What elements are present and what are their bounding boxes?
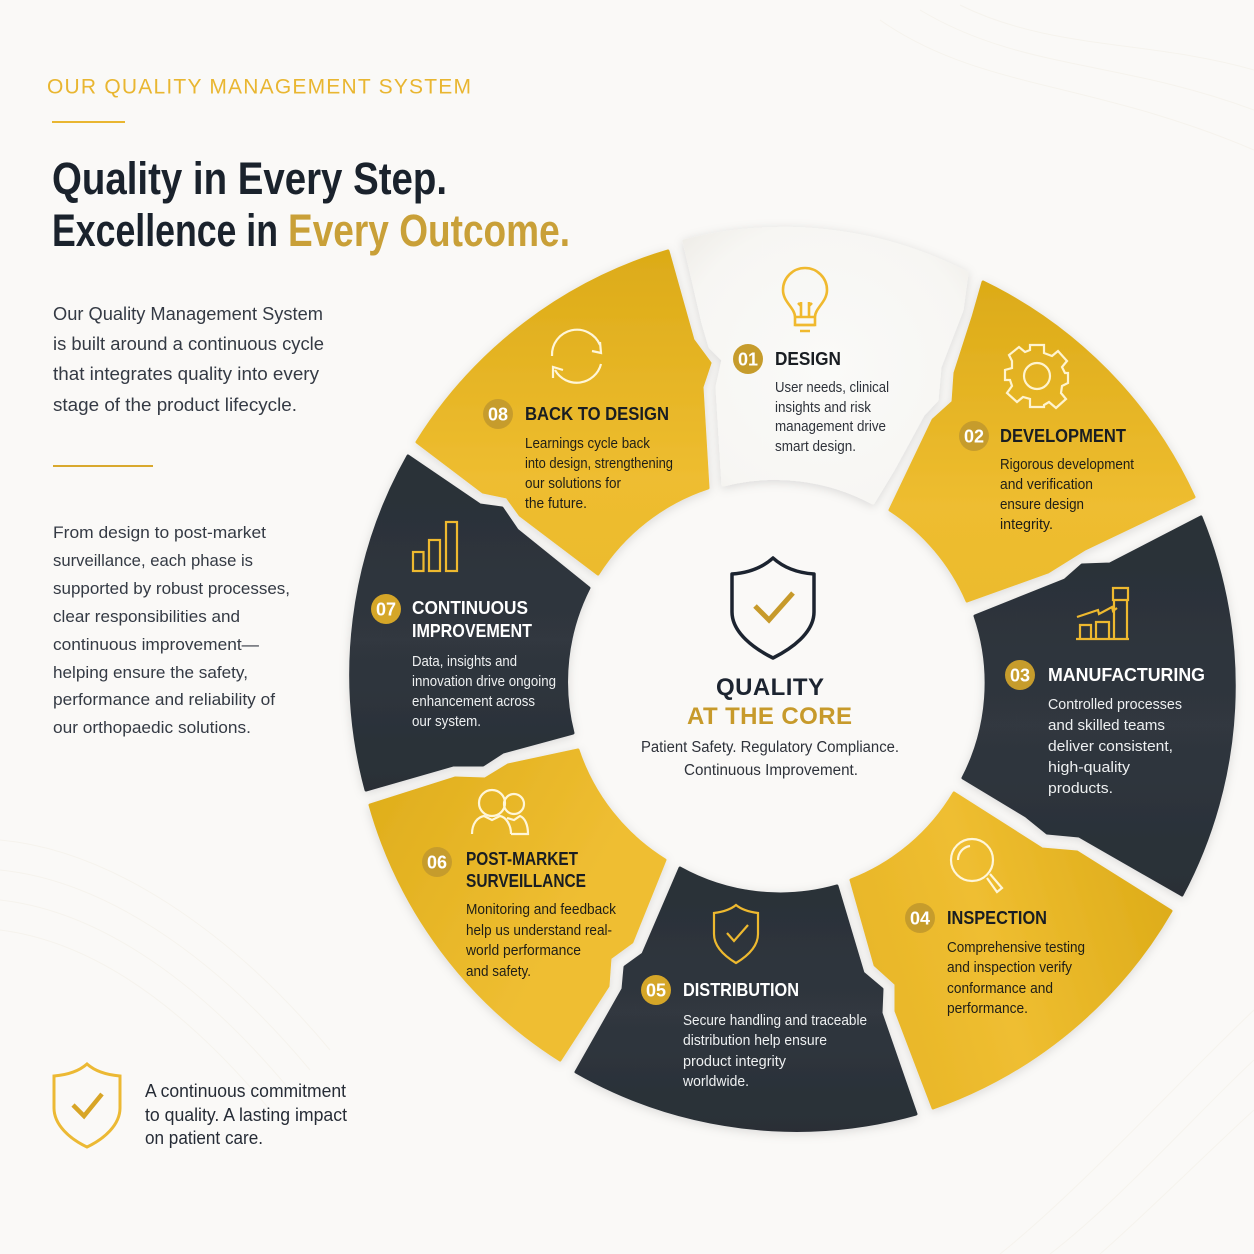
- heading: at the core: AT THE CORE: [687, 703, 852, 730]
- commitment statement: [145, 1081, 347, 1148]
- text: back to design body: the future.: [525, 496, 587, 512]
- supporting paragraph: From design to post-market: [53, 523, 266, 542]
- text: development body: integrity.: [1000, 517, 1053, 533]
- badge 07: [371, 594, 401, 624]
- main title: [52, 153, 570, 256]
- badge 08: 08: [488, 404, 508, 424]
- text: back to design body: into design, strengthening: [525, 456, 673, 472]
- supporting paragraph: surveillance, each phase is: [53, 551, 253, 570]
- text: inspection body: Comprehensive testing: [947, 940, 1085, 956]
- text: development body: [1000, 457, 1134, 533]
- text: back to design body: Learnings cycle back: [525, 436, 651, 452]
- text: distribution body: worldwide.: [682, 1074, 749, 1090]
- text: inspection body: conformance and: [947, 981, 1053, 997]
- text: continuous improvement body: [412, 654, 556, 730]
- centre: quality at the core: [641, 558, 899, 779]
- heading: distribution: DISTRIBUTION: [683, 979, 799, 1000]
- text: post-market body: [465, 902, 617, 980]
- heading: continuous improvement: [412, 597, 533, 641]
- text: inspection body: performance.: [947, 1001, 1028, 1017]
- supporting paragraph: clear responsibilities and: [53, 607, 240, 626]
- intro paragraph: [53, 303, 324, 415]
- text: continuous improvement body: Data, insights and: [412, 654, 517, 670]
- panel: 01 design: [684, 228, 967, 503]
- text: development body: Rigorous development: [1000, 457, 1134, 473]
- text: development body: ensure design: [1000, 497, 1084, 513]
- intro paragraph: that integrates quality into every: [53, 363, 320, 384]
- badge 06: [422, 847, 452, 877]
- heading: continuous improvement: IMPROVEMENT: [412, 620, 533, 641]
- badge 02: [959, 421, 989, 451]
- text: design body: smart design.: [775, 439, 856, 455]
- badge 05: [641, 975, 671, 1005]
- badge 01: 01: [738, 350, 758, 370]
- text: back to design body: our solutions for: [525, 476, 621, 492]
- main title: Quality in Every Step.: [52, 153, 447, 204]
- icon: factory chart: [1076, 588, 1129, 639]
- supporting paragraph: supported by robust processes,: [53, 579, 290, 598]
- text: inspection body: and inspection verify: [947, 960, 1073, 976]
- main title: Excellence in: [52, 205, 278, 256]
- text: continuous improvement body: our system.: [412, 714, 481, 730]
- heading: post-market surveillance: POST-MARKET: [466, 848, 579, 869]
- badge 05: 05: [646, 980, 666, 1000]
- text: post-market body: and safety.: [466, 964, 531, 980]
- badge 02: 02: [964, 426, 984, 446]
- panel: 04 inspection: [851, 793, 1171, 1108]
- icon: gear: [1005, 345, 1068, 408]
- icon: refresh arrows: [552, 330, 601, 383]
- icon: bar chart: [413, 522, 457, 571]
- badge 01: [733, 344, 763, 374]
- badge 08: [483, 399, 513, 429]
- intro paragraph: stage of the product lifecycle.: [53, 394, 297, 415]
- panel: 02 development: [890, 282, 1194, 601]
- text: manufacturing body: [1048, 697, 1182, 797]
- icon: commitment shield: [54, 1064, 120, 1147]
- supporting paragraph: continuous improvement—: [53, 635, 259, 654]
- badge 03: [1005, 660, 1035, 690]
- icon: central shield: [732, 558, 814, 658]
- text: distribution body: [682, 1013, 867, 1090]
- text: continuous improvement body: enhancement across: [412, 694, 535, 710]
- panel: 05 distribution: [576, 868, 916, 1130]
- supporting paragraph: helping ensure the safety,: [53, 663, 248, 682]
- text: design body: insights and risk: [775, 400, 872, 416]
- heading: continuous improvement: CONTINUOUS: [412, 597, 528, 618]
- text: design body: User needs, clinical: [775, 380, 889, 396]
- badge 04: 04: [910, 908, 930, 928]
- commitment statement: to quality. A lasting impact: [145, 1105, 347, 1125]
- kicker heading: OUR QUALITY MANAGEMENT SYSTEM: [47, 76, 471, 98]
- badge 03: 03: [1010, 666, 1030, 686]
- heading: quality: QUALITY: [716, 674, 824, 701]
- heading: post-market surveillance: [466, 848, 586, 891]
- badge 07: 07: [376, 600, 396, 620]
- text: continuous improvement body: innovation drive ongoing: [412, 674, 556, 690]
- intro paragraph: Our Quality Management System: [53, 303, 323, 324]
- supporting paragraph: our orthopaedic solutions.: [53, 718, 251, 737]
- supporting paragraph: performance and reliability of: [53, 690, 275, 709]
- commitment statement: on patient care.: [145, 1128, 263, 1148]
- text: manufacturing body: deliver consistent,: [1048, 739, 1173, 755]
- text: manufacturing body: Controlled processes: [1048, 697, 1182, 713]
- icon: shield check: [714, 905, 758, 963]
- text: post-market body: help us understand real-: [466, 923, 612, 939]
- icon: people: [472, 790, 528, 834]
- text: design body: [775, 380, 889, 455]
- heading: development: DEVELOPMENT: [1000, 425, 1127, 446]
- text: distribution body: product integrity: [683, 1054, 787, 1070]
- text: back to design body: [525, 436, 673, 512]
- intro paragraph: is built around a continuous cycle: [53, 333, 324, 354]
- text: manufacturing body: and skilled teams: [1048, 718, 1165, 734]
- text: distribution body: Secure handling and traceable: [683, 1013, 867, 1029]
- text: post-market body: Monitoring and feedback: [466, 902, 617, 918]
- commitment statement: A continuous commitment: [145, 1081, 346, 1101]
- text: manufacturing body: products.: [1048, 781, 1113, 797]
- text: centre tagline: [641, 739, 899, 779]
- text: centre tagline: Patient Safety. Regulatory Compliance.: [641, 739, 899, 756]
- icon: light bulb: [783, 268, 827, 331]
- badge 04: [905, 903, 935, 933]
- text: design body: management drive: [775, 419, 886, 435]
- supporting paragraph: [53, 523, 290, 737]
- text: centre tagline: Continuous Improvement.: [684, 762, 858, 779]
- heading: design: DESIGN: [775, 348, 841, 369]
- panel: 06 post-market surveillance: [370, 750, 665, 1060]
- text: distribution body: distribution help ensure: [683, 1033, 827, 1049]
- panel: 07 continuous improvement: [351, 456, 589, 790]
- heading: back to design: BACK TO DESIGN: [525, 403, 669, 424]
- panel: 03 manufacturing: [963, 517, 1234, 895]
- badge 06: 06: [427, 852, 447, 872]
- heading: post-market surveillance: SURVEILLANCE: [466, 870, 586, 891]
- text: inspection body: [947, 940, 1085, 1017]
- heading: inspection: INSPECTION: [947, 907, 1047, 928]
- heading: manufacturing: MANUFACTURING: [1048, 664, 1205, 685]
- text: manufacturing body: high-quality: [1048, 760, 1131, 776]
- panel: 08 back to design: [417, 251, 710, 574]
- icon: magnifier: [951, 839, 1002, 892]
- main title: Every Outcome.: [288, 205, 570, 256]
- text: post-market body: world performance: [465, 943, 581, 959]
- text: development body: and verification: [1000, 477, 1093, 493]
